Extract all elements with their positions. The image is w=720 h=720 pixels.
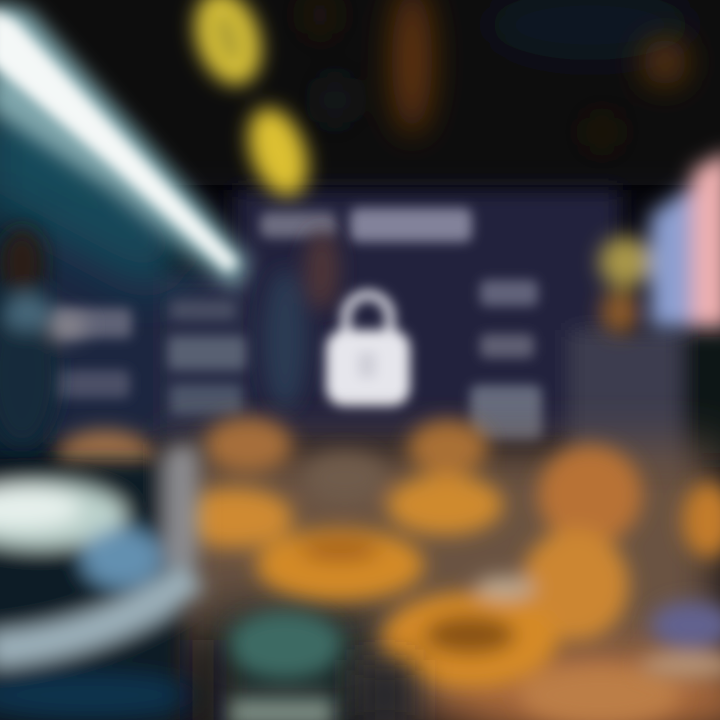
ceiling light strip	[0, 0, 250, 290]
dark foreground base	[190, 640, 415, 720]
right text blocks	[470, 280, 542, 440]
ceiling light core	[0, 8, 238, 272]
blue dish at lower right	[640, 601, 720, 677]
person at left	[0, 228, 86, 447]
orange food items	[55, 417, 720, 720]
background: dark ceiling	[0, 0, 720, 185]
teal object at bottom	[225, 611, 343, 720]
heading on panel	[260, 208, 472, 242]
figure in front of panel	[263, 230, 339, 410]
teal glow under light strip	[0, 70, 200, 290]
table surface	[170, 445, 720, 720]
background: navy wall panel	[0, 130, 720, 480]
left text blocks	[52, 300, 246, 415]
icon: padlock	[326, 295, 410, 406]
yellow ceiling lamps	[184, 0, 319, 204]
dim orange ceiling lights	[306, 0, 687, 148]
flag graphic	[599, 150, 720, 334]
car at lower left	[0, 445, 200, 720]
